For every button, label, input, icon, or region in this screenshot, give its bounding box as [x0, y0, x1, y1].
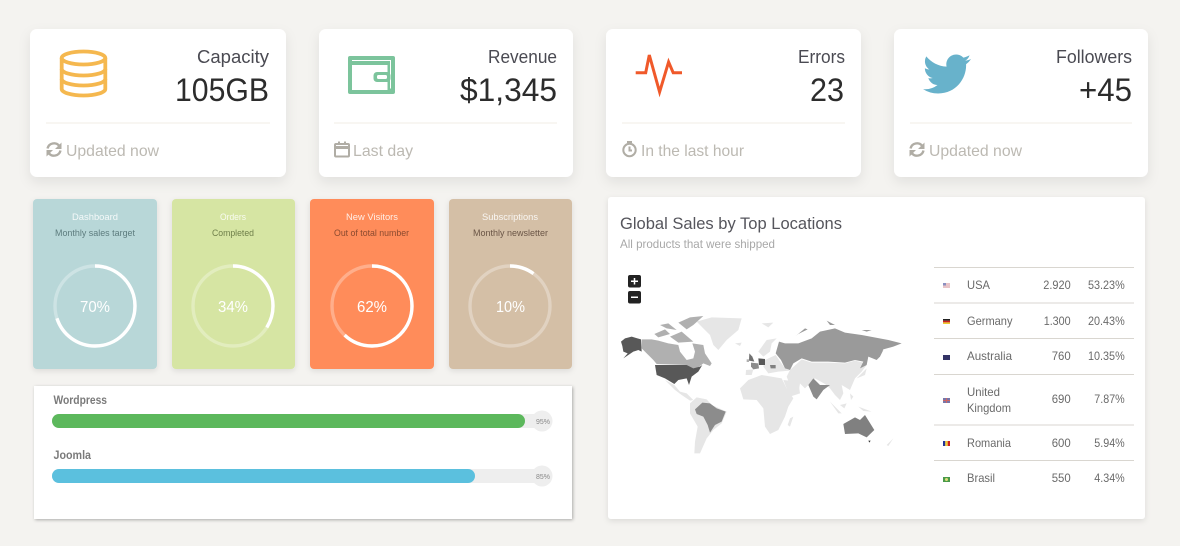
- icon: stopwatch: [623, 142, 636, 156]
- percent: 10%: [496, 299, 525, 316]
- row: Brasil: 550: [1052, 471, 1071, 485]
- row: United Kingdom: 690: [1052, 392, 1071, 406]
- value: errors: 23: [810, 72, 844, 108]
- heading: revenue: Revenue: [488, 47, 557, 67]
- heading: global sales: Global Sales by Top Locations: [620, 214, 842, 233]
- icon: refresh: [46, 142, 62, 156]
- subheading: All products that were shipped: [620, 237, 775, 251]
- icon: refresh: [910, 142, 924, 156]
- icon: heartbeat: [636, 55, 682, 92]
- bar: joomla 85%: [52, 466, 552, 486]
- panel: errors card: [606, 29, 861, 177]
- card subtitle: Completed: [212, 228, 254, 239]
- row: United Kingdom: Kingdom: [967, 401, 1011, 415]
- row: United Kingdom: 7.87%: [1094, 392, 1125, 406]
- heading: errors: Errors: [798, 47, 845, 67]
- footer text: Last day: [353, 143, 413, 160]
- donut 10%: [470, 266, 550, 346]
- percent: 70%: [80, 299, 110, 316]
- row: USA: USA: [967, 278, 990, 292]
- bar: wordpress 95%: 95%: [536, 417, 550, 426]
- panel: capacity card: [30, 29, 286, 177]
- row: USA: 53.23%: [1088, 278, 1125, 292]
- bar label: joomla: Joomla: [54, 450, 92, 462]
- row: Australia: 760: [1052, 349, 1071, 363]
- icon: wallet: [348, 56, 395, 94]
- icon: calendar: [335, 142, 349, 156]
- card subtitle: Out of total number: [334, 228, 409, 239]
- row: United Kingdom: United: [967, 385, 1000, 399]
- row: Australia: [943, 349, 1125, 363]
- panel: progress bars: [34, 386, 572, 519]
- card title: Orders: [220, 212, 246, 223]
- panel: dashboard gauge: [33, 199, 157, 369]
- row: Brasil: [943, 471, 1125, 485]
- heading: followers: Followers: [1056, 47, 1132, 67]
- card subtitle: Monthly newsletter: [473, 228, 548, 239]
- icon: twitter bird: [923, 54, 971, 94]
- row: USA: [943, 278, 1125, 292]
- percent: 62%: [357, 299, 387, 316]
- row: Brasil: 4.34%: [1094, 471, 1125, 485]
- row: United Kingdom: [943, 385, 1125, 415]
- row: Romania: [943, 436, 1125, 450]
- row: Germany: 20.43%: [1088, 314, 1125, 328]
- icon: database: [62, 52, 105, 96]
- value: revenue: $1,345: [460, 72, 557, 108]
- panel: subscriptions gauge: [449, 199, 572, 369]
- row: Australia: Australia: [967, 349, 1012, 363]
- row: Brasil: Brasil: [967, 471, 995, 485]
- row: Romania: 600: [1052, 436, 1071, 450]
- world map: [621, 316, 902, 453]
- footer text: In the last hour: [641, 143, 745, 160]
- panel: orders gauge: [172, 199, 295, 369]
- donut 34%: [193, 266, 273, 346]
- footer text: Updated now: [929, 143, 1022, 160]
- footer text: Updated now: [66, 143, 159, 160]
- row: Romania: 5.94%: [1094, 436, 1125, 450]
- card title: Subscriptions: [482, 212, 538, 223]
- bar label: wordpress: Wordpress: [54, 395, 107, 407]
- row: Romania: Romania: [967, 436, 1011, 450]
- map zoom controls: [628, 275, 641, 304]
- panel: new visitors gauge: [310, 199, 434, 369]
- value: capacity: 105GB: [175, 72, 269, 108]
- heading: capacity: Capacity: [197, 47, 269, 67]
- panel: global sales: [608, 197, 1145, 519]
- donut 62%: [332, 266, 412, 346]
- value: followers: +45: [1079, 72, 1132, 108]
- row: Australia: 10.35%: [1088, 349, 1125, 363]
- locations table: [934, 268, 1134, 485]
- card title: Dashboard: [72, 212, 118, 223]
- bar: joomla 85%: 85%: [536, 472, 550, 481]
- card subtitle: Monthly sales target: [55, 228, 135, 239]
- panel: revenue card: [319, 29, 573, 177]
- percent: 34%: [218, 299, 248, 316]
- row: USA: 2.920: [1043, 278, 1071, 292]
- donut 70%: [55, 266, 135, 346]
- row: Germany: 1.300: [1044, 314, 1071, 328]
- panel: followers card: [894, 29, 1148, 177]
- row: Germany: [943, 314, 1125, 328]
- row: Germany: Germany: [967, 314, 1012, 328]
- bar: wordpress 95%: [52, 410, 552, 432]
- card title: New Visitors: [346, 212, 398, 223]
